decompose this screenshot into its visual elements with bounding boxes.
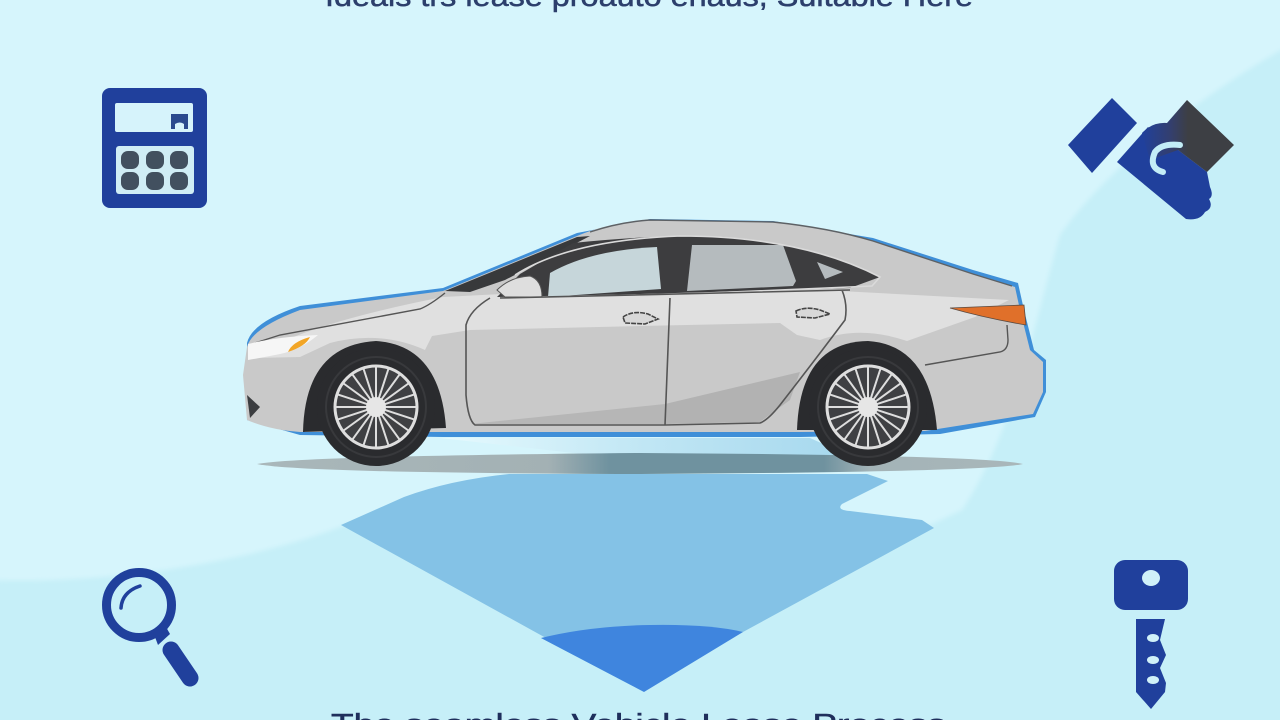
front wheel xyxy=(317,348,435,466)
rear wheel xyxy=(809,348,927,466)
icon: magnifying glass xyxy=(106,572,190,678)
ground shadow xyxy=(257,453,1023,474)
icon: handshake xyxy=(1068,98,1234,219)
headlight xyxy=(248,335,318,360)
under-car glow xyxy=(440,438,850,456)
car body xyxy=(243,220,1043,432)
windshield dark wedge xyxy=(445,236,590,292)
quarter window xyxy=(817,262,843,279)
icon: key xyxy=(1114,560,1188,709)
fog lamp xyxy=(247,395,260,418)
body lower shade xyxy=(665,372,800,424)
windows frame xyxy=(497,236,880,297)
car xyxy=(243,219,1046,466)
door handles xyxy=(623,308,830,324)
tail light xyxy=(950,305,1026,325)
car blue outline xyxy=(247,219,1046,437)
side mirror xyxy=(497,276,542,297)
front window xyxy=(548,247,661,297)
rear window xyxy=(687,245,796,291)
outline xyxy=(590,220,1012,286)
door lines xyxy=(466,290,850,425)
beam tip xyxy=(541,625,743,692)
blue funnel beam xyxy=(341,474,934,692)
wheel arches xyxy=(300,341,446,432)
roof line xyxy=(515,236,880,296)
icon: calculator xyxy=(102,88,207,208)
body light highlight xyxy=(252,291,1009,358)
